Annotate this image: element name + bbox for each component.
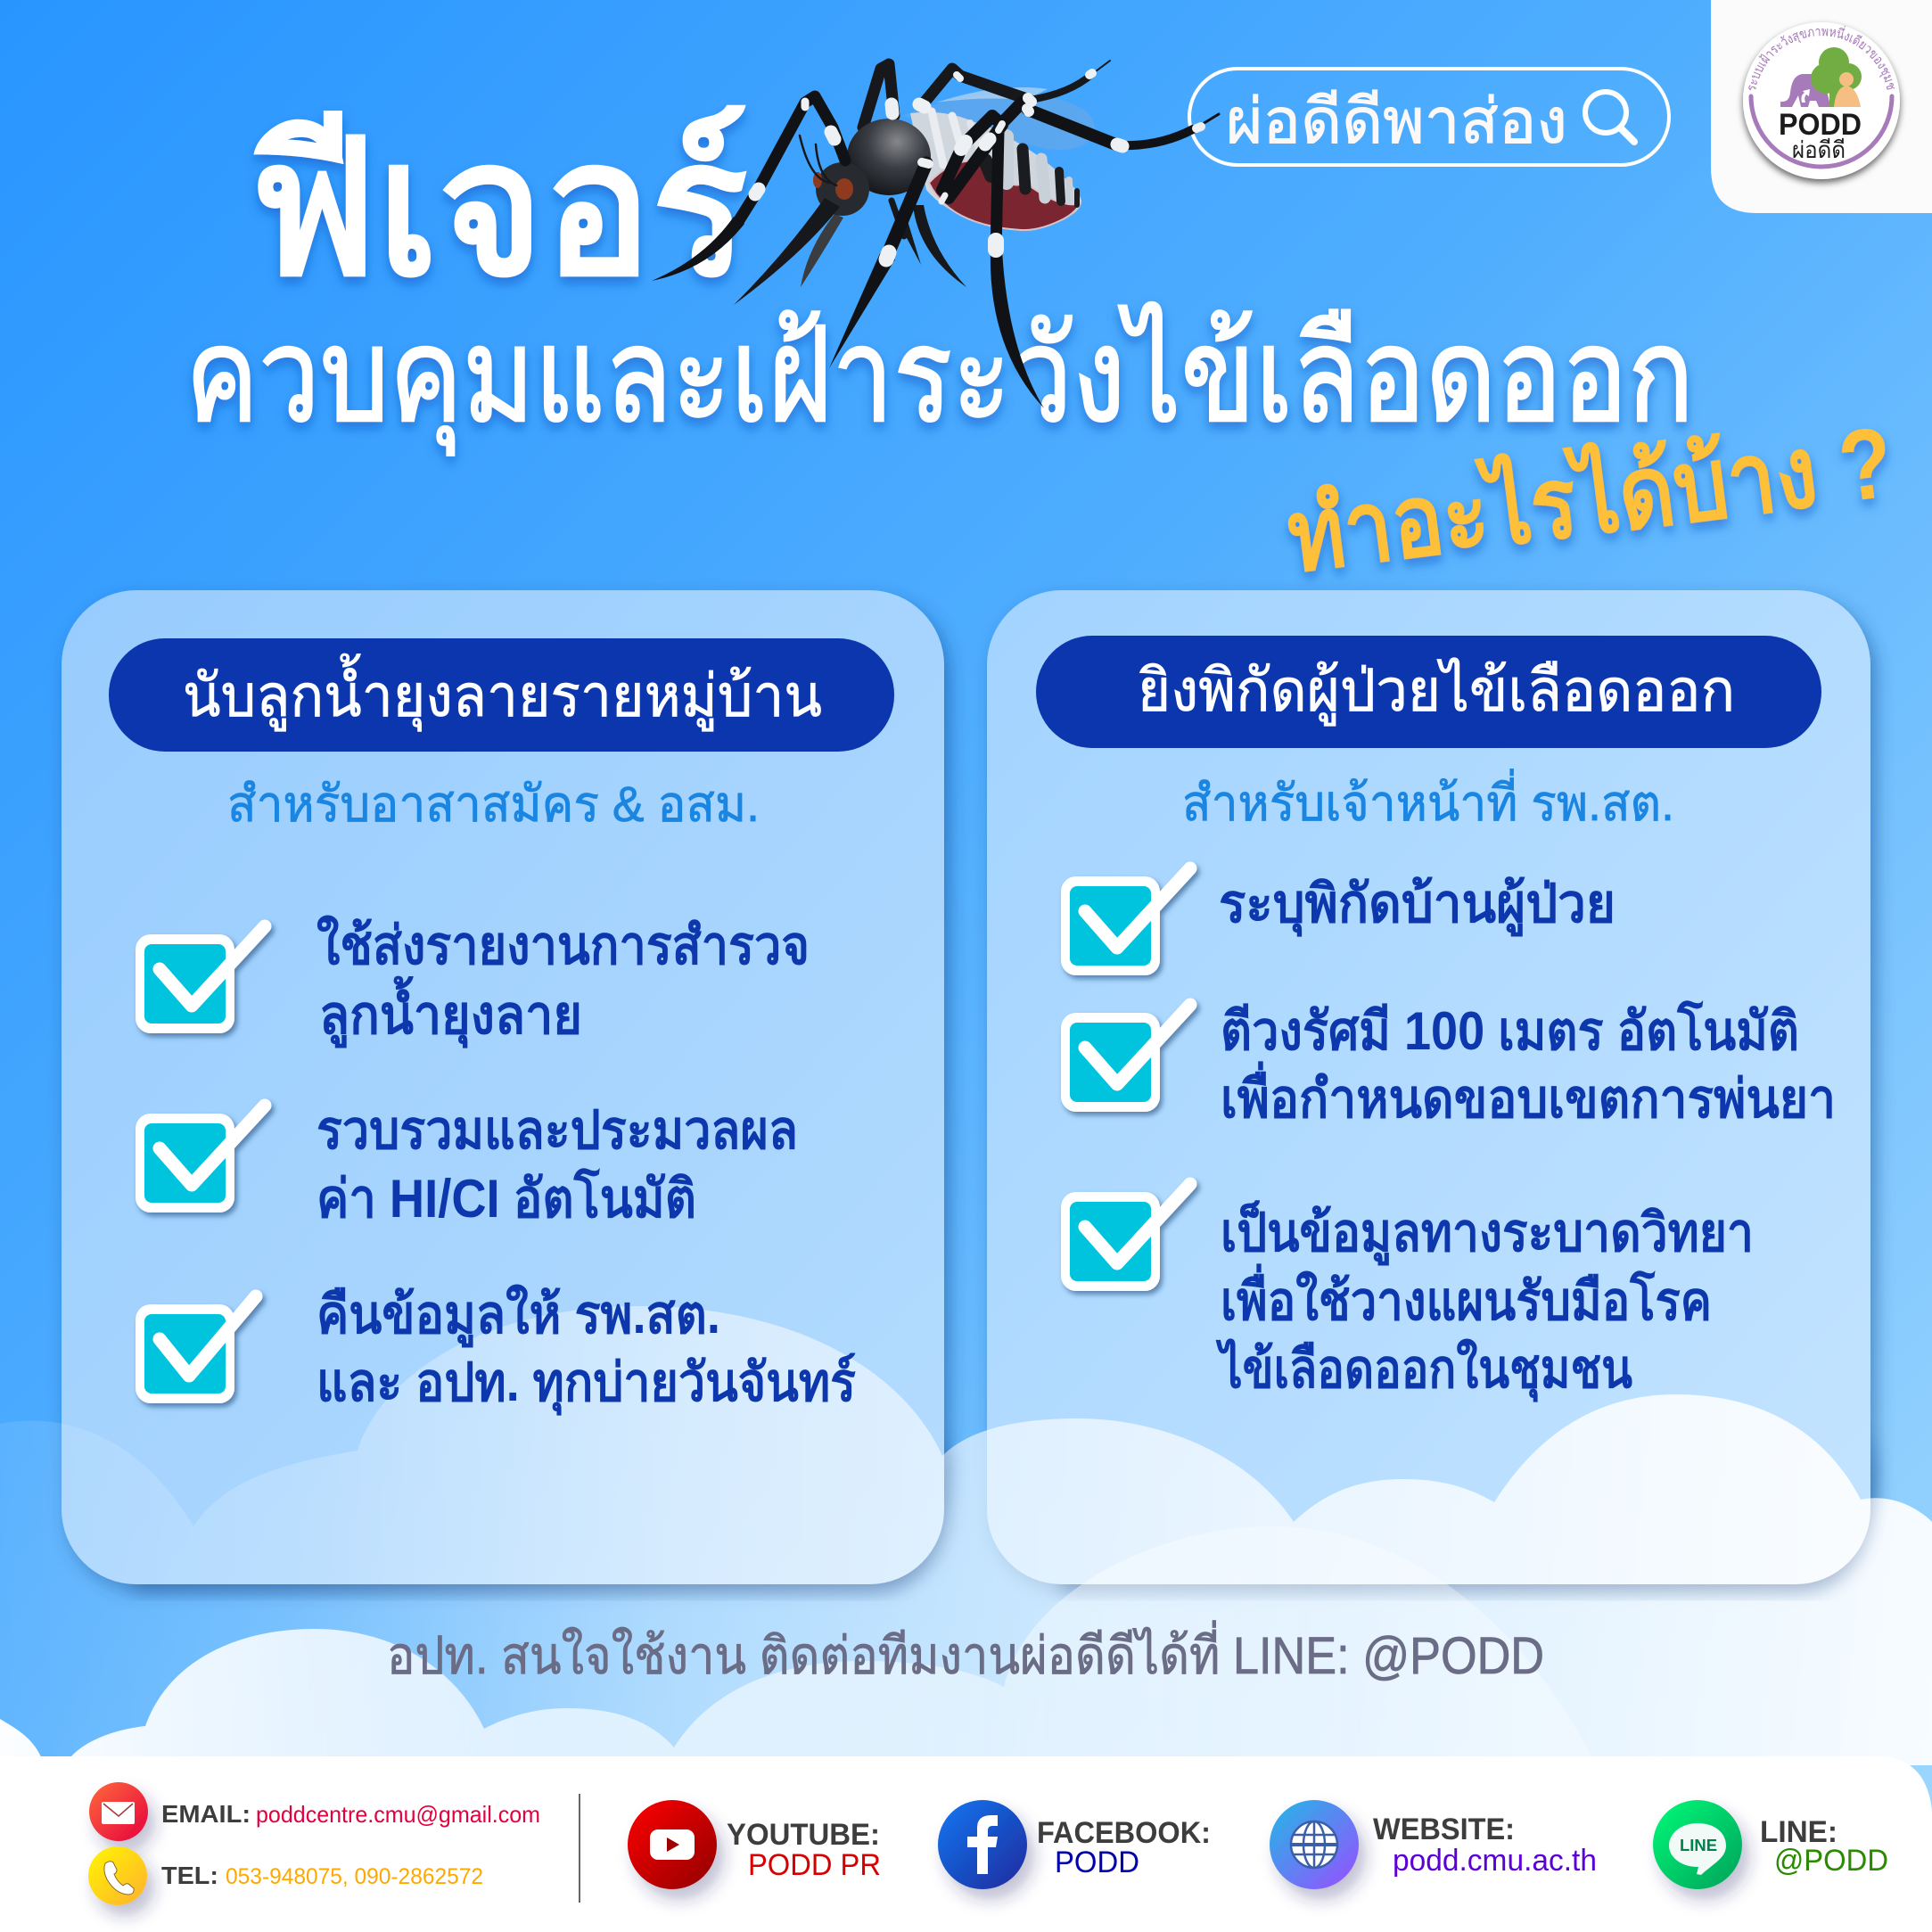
footer: line: @PODD (1774, 1844, 1888, 1878)
far legs (801, 61, 1110, 287)
right card subheading: สำหรับเจ้าหน้าที่ รพ.สต. (1182, 769, 1674, 831)
left card subheading: สำหรับอาสาสมัคร & อสม. (227, 776, 760, 832)
youtube text: YOUTUBE: (727, 1818, 880, 1852)
footer divider (579, 1794, 580, 1903)
icon: globe (1270, 1800, 1359, 1889)
right card heading text: ยิงพิกัดผู้ป่วยไข้เลือดออก (1138, 657, 1735, 727)
logo: PODD badge: ผ่อดีดี (1792, 136, 1846, 163)
icon: checkbox (136, 1296, 256, 1403)
text: เป็นข้อมูลทางระบาดวิทยา (1221, 1200, 1754, 1266)
telephone text: TEL: (161, 1862, 218, 1889)
website text: WEBSITE: (1373, 1813, 1515, 1846)
text: รวบรวมและประมวลผล (317, 1100, 798, 1160)
text: คืนข้อมูลให้ รพ.สต. (317, 1284, 720, 1348)
footer: telephone (88, 1846, 483, 1905)
icon: checkbox (1061, 1005, 1190, 1112)
text: ใช้ส่งรายงานการสำรวจ (317, 915, 810, 975)
icon: checkbox (136, 926, 265, 1033)
right item 1 (1061, 868, 1615, 975)
icon: magnifier (1585, 92, 1634, 142)
left card heading pill (109, 638, 894, 752)
footer: website: podd.cmu.ac.th (1393, 1844, 1597, 1878)
contact note: อปท. สนใจใช้งาน ติดต่อทีมงานผ่อดีดีได้ที่ LINE: @PODD (387, 1620, 1544, 1685)
text (1215, 1200, 1754, 1402)
text: ค่า HI/CI อัตโนมัติ (317, 1167, 696, 1229)
right card heading pill (1036, 636, 1821, 748)
text (317, 915, 810, 1048)
thorax and head (847, 119, 931, 195)
title: feature: ฟีเจอร์ (250, 103, 748, 314)
left item 1 (136, 915, 810, 1048)
text: ระบุพิกัดบ้านผู้ป่วย (1219, 874, 1615, 937)
proboscis (734, 198, 840, 305)
icon: mail (89, 1782, 148, 1841)
footer: facebook: PODD (1055, 1846, 1139, 1879)
footer: website (1270, 1800, 1597, 1889)
search pill text: ผ่อดีดีพาส่อง (1226, 86, 1567, 156)
right item 2 (1061, 999, 1836, 1129)
icon: line (1653, 1800, 1742, 1889)
text: ตีวงรัศมี 100 เมตร อัตโนมัติ (1221, 999, 1799, 1061)
icon: checkbox (1061, 1184, 1190, 1291)
abdomen (910, 112, 1081, 230)
text: ลูกน้ำยุงลาย (319, 975, 582, 1048)
text (317, 1100, 798, 1229)
footer: youtube (628, 1800, 881, 1889)
panel shadows over clouds (134, 1426, 1876, 1592)
footer: youtube: PODD PR (748, 1848, 881, 1882)
right item 3 (1061, 1184, 1754, 1402)
antennae (800, 136, 836, 185)
leg bands (755, 73, 1201, 259)
text (317, 1284, 856, 1416)
clouds: back layer (0, 1306, 1932, 1765)
near legs (652, 96, 1219, 408)
email text: EMAIL: (161, 1800, 251, 1828)
text: เพื่อใช้วางแผนรับมือโรค (1221, 1263, 1712, 1331)
left item 3 (136, 1284, 856, 1416)
footer: facebook (938, 1800, 1211, 1889)
icon: phone (88, 1846, 147, 1905)
line text: LINE: (1760, 1815, 1837, 1849)
panel: left card (62, 590, 944, 1584)
logo: PODD badge (1738, 21, 1905, 188)
left card heading text: นับลูกน้ำยุงลายรายหมู่บ้าน (183, 654, 822, 732)
footer: telephone: 053-948075, 090-2862572 (226, 1864, 483, 1889)
text: ไข้เลือดออกในชุมชน (1215, 1337, 1632, 1402)
footer background (0, 1756, 1932, 1932)
icon: line: LINE (1680, 1837, 1717, 1854)
text: และ อปท. ทุกบ่ายวันจันทร์ (317, 1352, 856, 1416)
left item 2 (136, 1100, 798, 1229)
icon: youtube (628, 1800, 717, 1889)
icon: checkbox (136, 1106, 265, 1213)
facebook text: FACEBOOK: (1037, 1816, 1211, 1850)
footer: email (89, 1782, 540, 1841)
search pill (1189, 69, 1669, 165)
text: เพื่อกำหนดขอบเขตการพ่นยา (1221, 1061, 1836, 1129)
text (1221, 999, 1836, 1129)
mosquito illustration (652, 61, 1219, 408)
logo tab (1711, 0, 1932, 213)
logo: PODD badge: PODD (1779, 108, 1862, 142)
icon: checkbox (1061, 868, 1190, 975)
panel: right card (987, 590, 1870, 1584)
icon: facebook (938, 1800, 1027, 1889)
footer: line (1653, 1800, 1888, 1889)
footer: email: poddcentre.cmu@gmail.com (256, 1801, 540, 1828)
clouds: front layer (0, 1526, 1596, 1765)
wings (902, 87, 1095, 150)
